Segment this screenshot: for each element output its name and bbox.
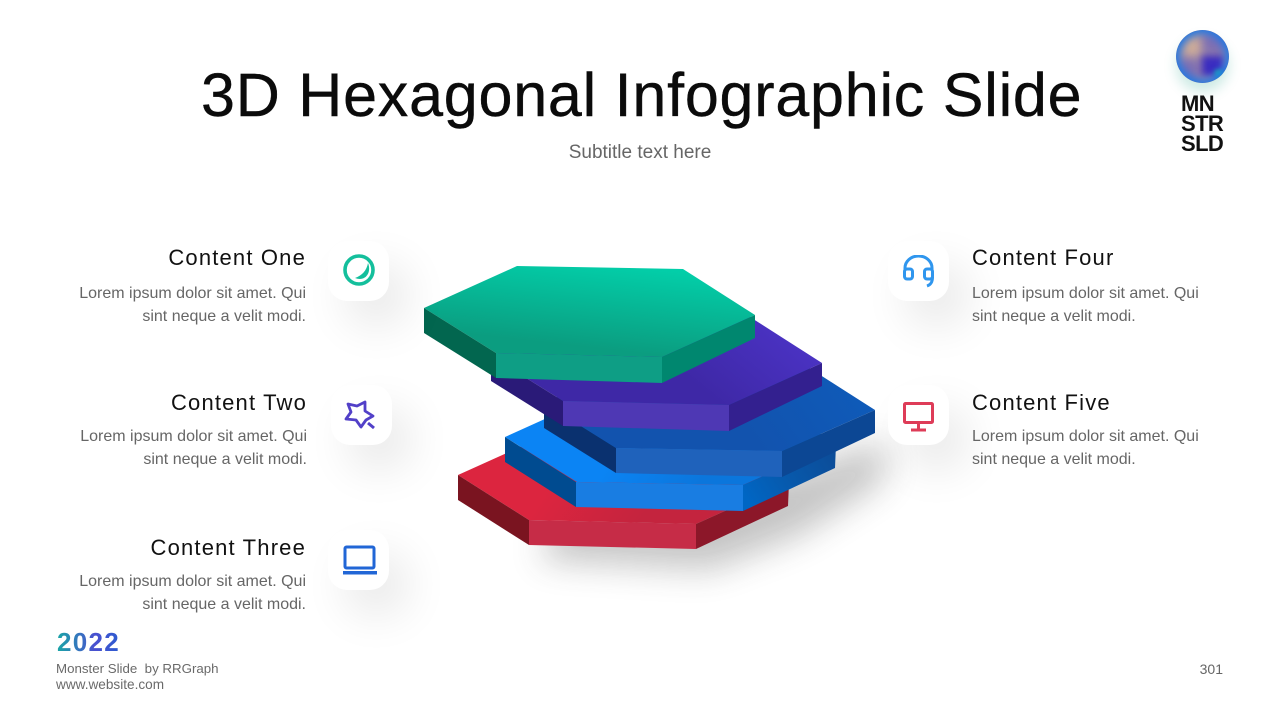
heading five: Content Five [972,390,1111,415]
heading two: Content Two [171,390,307,415]
text five [972,428,1199,468]
text one [79,285,306,325]
green layer [424,266,755,383]
footer credits [56,661,219,692]
text two: Lorem ipsum dolor sit amet. Qui [80,428,307,445]
block: content five [903,390,1199,470]
text five: sint neque a velit modi. [972,451,1136,468]
text two [80,428,307,468]
text three [79,573,306,613]
footer year: 2022 [57,627,120,657]
heading one: Content One [168,245,306,270]
page number: 301 [1200,661,1223,677]
icon: crescent circle [343,254,375,286]
block: content four [903,245,1199,326]
logo sphere [1176,30,1229,83]
purple layer [491,314,822,431]
block: content two [80,390,410,470]
logo [1171,30,1234,156]
heading three: Content Three [151,535,306,560]
icon: laptop [343,546,377,574]
icon card four [888,241,949,301]
logo text [1181,91,1224,156]
logo text: STR [1181,111,1223,136]
stack shadow [540,440,885,570]
red layer [458,433,789,549]
dark blue layer [544,361,875,477]
light blue layer [505,395,836,511]
block: content three [79,535,408,614]
text four: Lorem ipsum dolor sit amet. Qui [972,285,1199,302]
text four: sint neque a velit modi. [972,308,1136,325]
text one: Lorem ipsum dolor sit amet. Qui [79,285,306,302]
logo text: MN [1181,91,1214,116]
block: content one [79,245,408,326]
text one: sint neque a velit modi. [142,308,306,325]
icon card three [328,530,389,590]
heading four: Content Four [972,245,1114,270]
text four [972,285,1199,325]
icon card five [888,385,949,445]
text three: sint neque a velit modi. [142,596,306,613]
logo text: SLD [1181,131,1223,156]
icon: monitor [903,402,934,432]
text five: Lorem ipsum dolor sit amet. Qui [972,428,1199,445]
icon card one [328,241,389,301]
footer credits: www.website.com [56,677,164,692]
text two: sint neque a velit modi. [143,451,307,468]
footer credits: Monster Slide by RRGraph [56,661,219,676]
icon: magic star [344,400,375,430]
subtitle: Subtitle text here [569,142,711,163]
text three: Lorem ipsum dolor sit amet. Qui [79,573,306,590]
title: 3D Hexagonal Infographic Slide [201,61,1082,129]
icon: headset [903,255,934,288]
icon card two [331,385,392,445]
